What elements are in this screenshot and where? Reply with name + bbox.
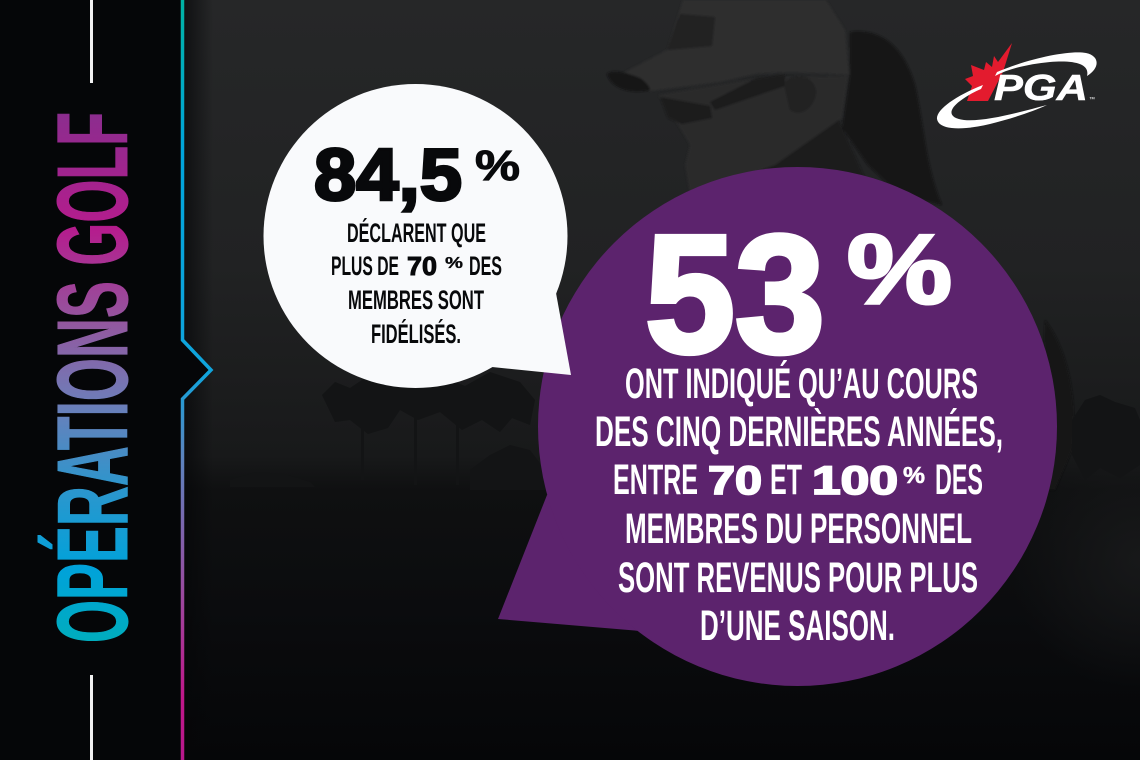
golfer xyxy=(607,0,1074,490)
stat description: 70 xyxy=(708,459,762,503)
stat description: % xyxy=(445,255,463,272)
stat description xyxy=(331,217,502,349)
left sidebar panel xyxy=(0,0,213,760)
stat description: D’UNE SAISON. xyxy=(700,602,895,650)
bottom white rule xyxy=(90,675,93,760)
stat: 84,5 %: % xyxy=(475,142,520,190)
right side field tone xyxy=(1010,430,1140,690)
logo wordmark: PGA xyxy=(994,67,1088,108)
icon: red maple leaf xyxy=(965,43,1012,101)
stat: 84,5 %: 84,5 xyxy=(314,135,462,216)
headline stat: 53 % xyxy=(645,200,952,388)
stat description: DES xyxy=(935,456,983,504)
stat description: FIDÉLISÉS. xyxy=(371,318,461,349)
stat: 84,5 % xyxy=(314,135,520,216)
purple speech bubble xyxy=(498,167,1057,686)
stat description: 100 xyxy=(812,459,898,503)
stat description: % xyxy=(903,462,925,488)
stat description: MEMBRES SONT xyxy=(348,285,484,315)
golfer arm beside bubble xyxy=(1040,320,1074,490)
PGA of Canada logo xyxy=(937,43,1097,128)
icon: white swoosh xyxy=(937,52,1097,128)
stat description xyxy=(595,360,1003,650)
headline stat: 53 %: 53 xyxy=(645,200,825,388)
stat description: ENTRE xyxy=(613,456,698,504)
stat description: DÉCLARENT QUE xyxy=(347,217,486,248)
palm trees xyxy=(230,372,1140,490)
stat description: DES xyxy=(469,251,502,281)
stat description: ET xyxy=(770,456,802,504)
stat description: 70 xyxy=(407,251,437,281)
headline stat: 53 %: % xyxy=(847,214,952,324)
sidebar accent line with chevron xyxy=(182,0,211,760)
trademark: ™ xyxy=(1089,96,1095,103)
top white rule xyxy=(90,0,93,83)
stat description: PLUS DE xyxy=(331,251,399,281)
white speech bubble xyxy=(264,84,571,388)
